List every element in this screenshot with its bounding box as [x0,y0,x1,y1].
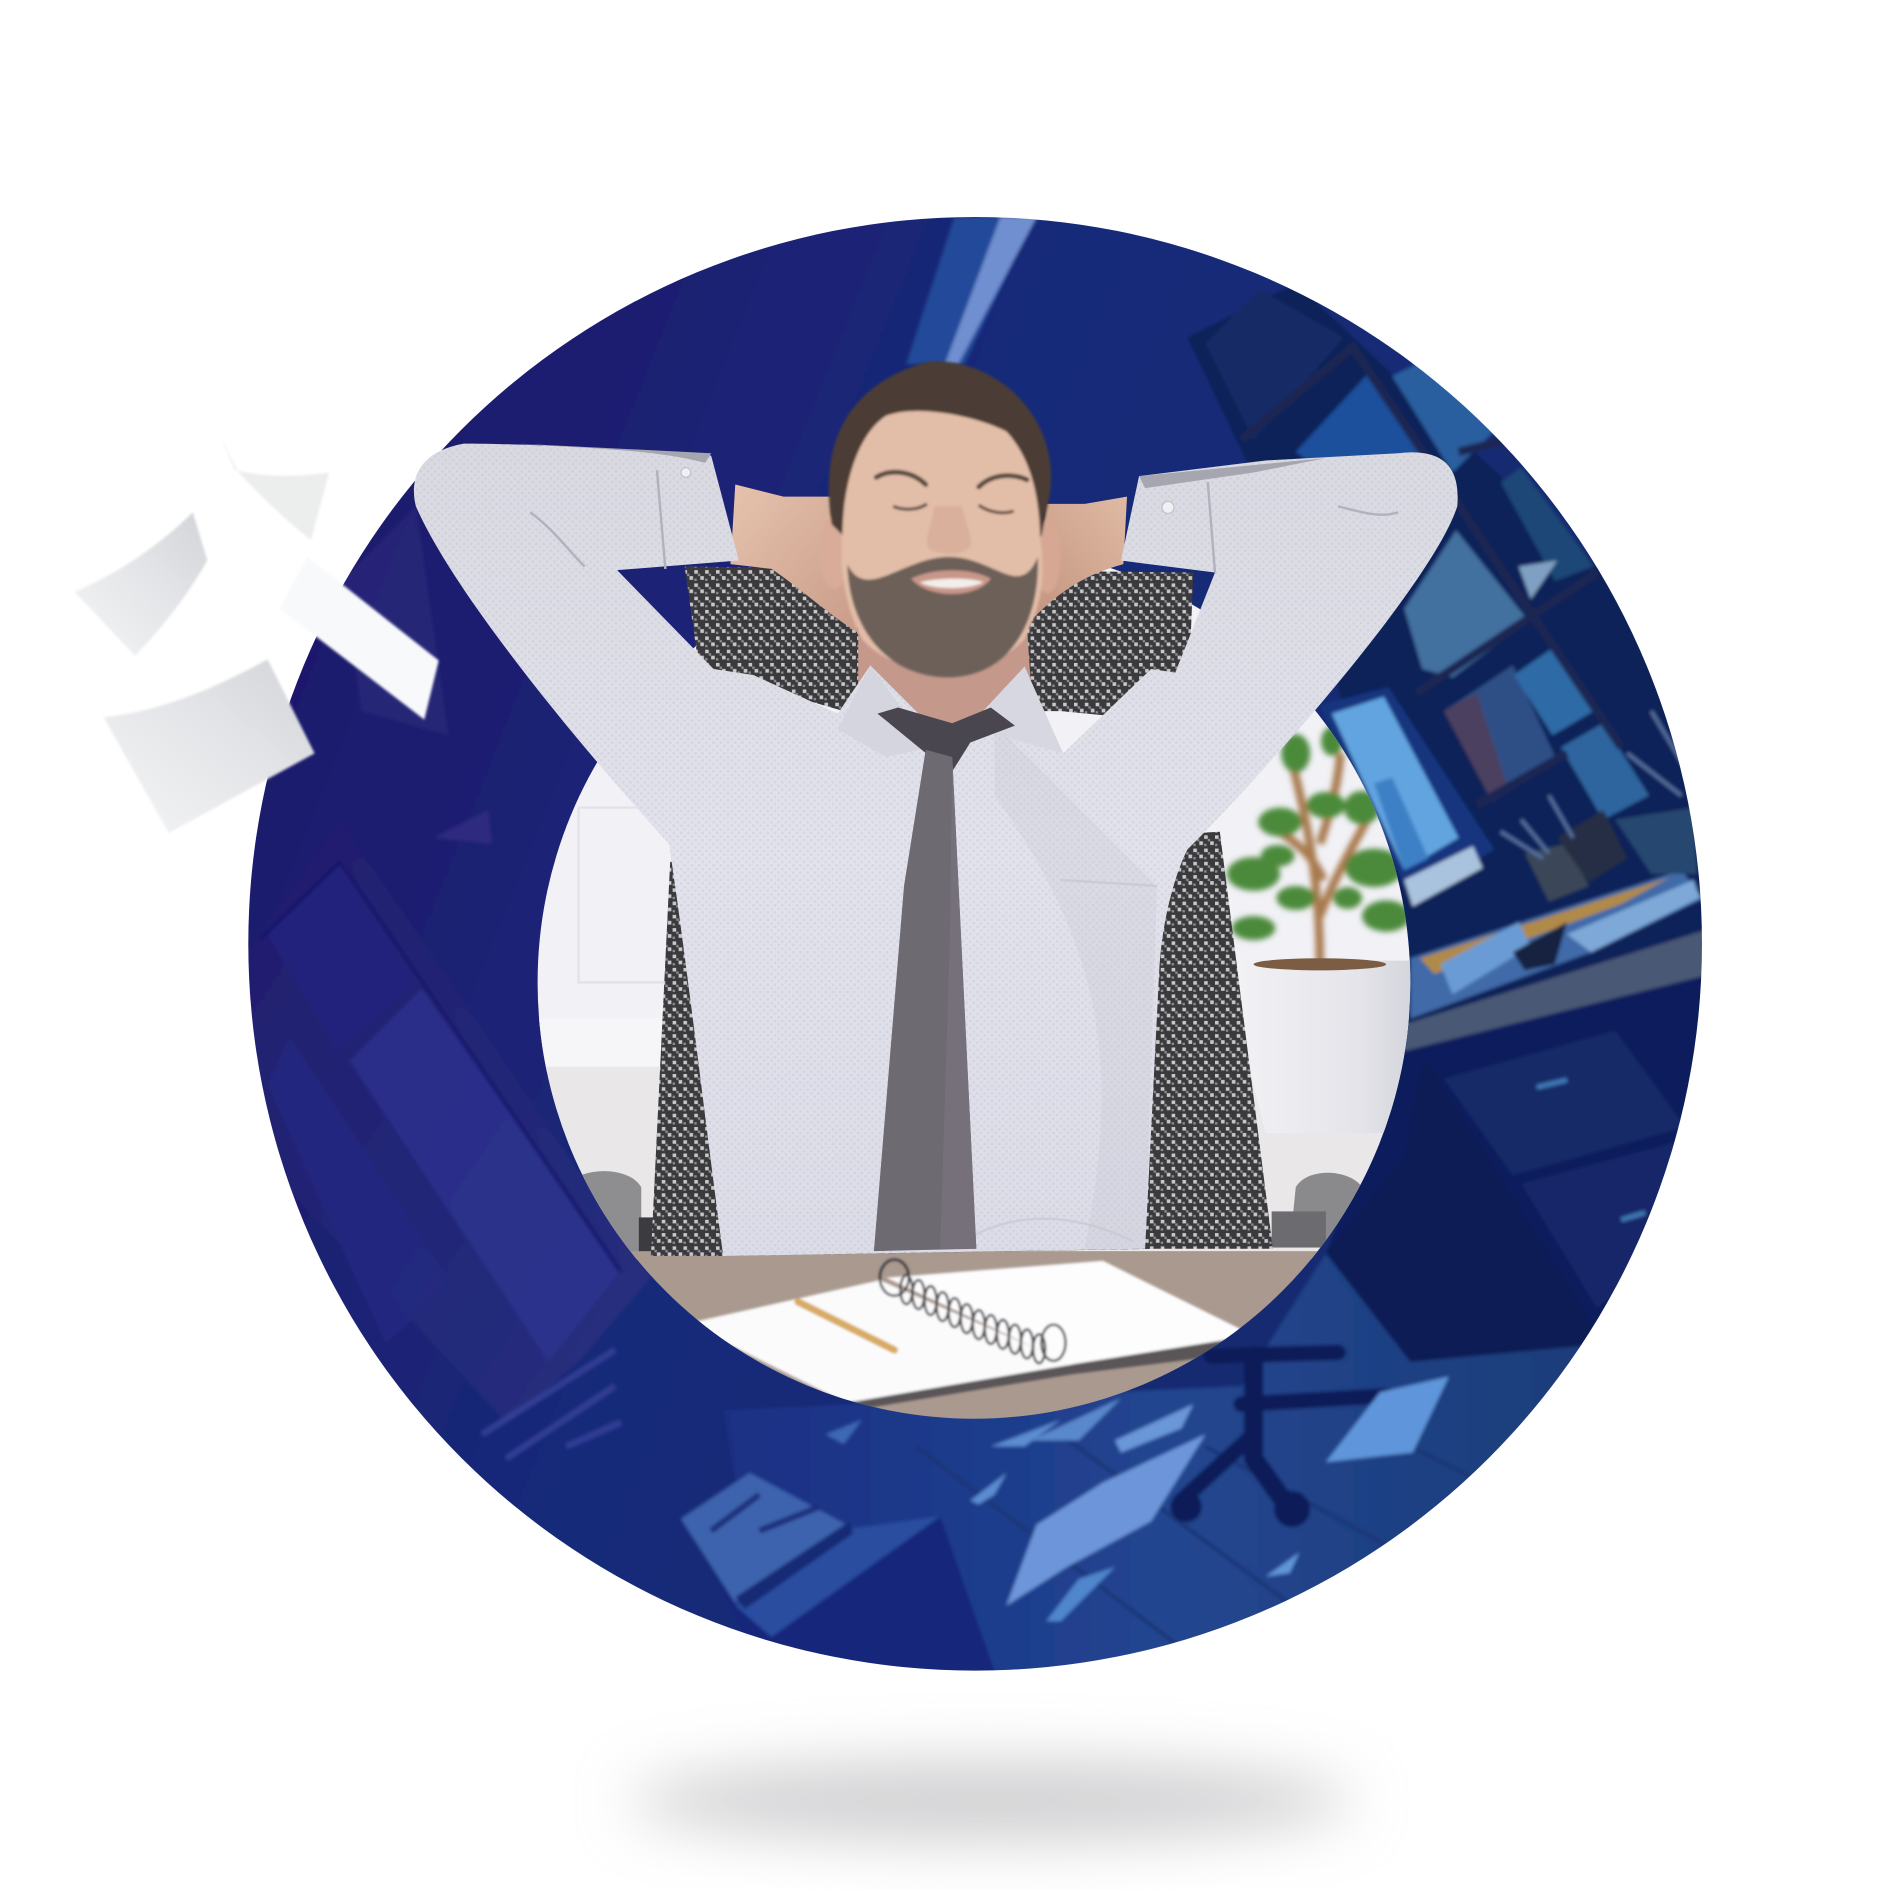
potted plant [1227,727,1413,1133]
sleeve shading and folds [518,444,1326,488]
beard [847,557,1038,677]
floor and baseboard [530,1019,1422,1260]
small desk on floor [681,1473,1000,1688]
left forearm and hand [730,485,858,633]
ears [820,516,849,588]
neck [858,627,1032,741]
spiral binding [880,1260,1066,1363]
flying paper sheets [75,438,439,833]
sheet bottom [104,659,315,833]
desk edge [1404,928,1712,1051]
head [820,361,1061,677]
upper-left wall panel [344,506,448,735]
nose [927,506,972,554]
chair back: mesh [651,567,1273,1256]
sheet upper [221,438,329,540]
eyebrows [876,472,1027,487]
top light streak [906,217,1037,364]
sheet white strip [280,557,439,720]
armrests [581,1171,1362,1256]
desk surface [630,1251,1318,1419]
monitor [1320,687,1495,906]
closed eyes [893,504,1014,513]
cuff buttons [681,468,691,477]
ring: dark office scene background [241,211,1712,1688]
tie [874,708,1015,1251]
shelf boards [1242,344,1621,805]
floor planks [916,1441,1431,1644]
pen cups [1501,711,1688,902]
floor [723,1254,1603,1688]
bookshelf on the right [1187,283,1712,1051]
mouth [911,570,991,594]
man relaxing [414,361,1458,1256]
sheet left [75,512,207,656]
ground shadow [629,1760,1352,1842]
hair [829,361,1051,536]
face [841,411,1042,670]
door panel [579,808,669,982]
shirt [414,444,1458,1256]
right forearm and hand [1031,497,1127,621]
collar [838,665,1063,757]
fallen office chair [1174,1352,1386,1524]
notebook [687,1260,1254,1410]
left cabinet [247,810,651,1458]
wall [530,542,1422,1073]
drawers lower right [1326,974,1712,1368]
desk clutter [1410,808,1703,1019]
scattered papers [826,1377,1449,1621]
inner circle: bright office photo [530,542,1422,1432]
pen [798,1302,894,1350]
